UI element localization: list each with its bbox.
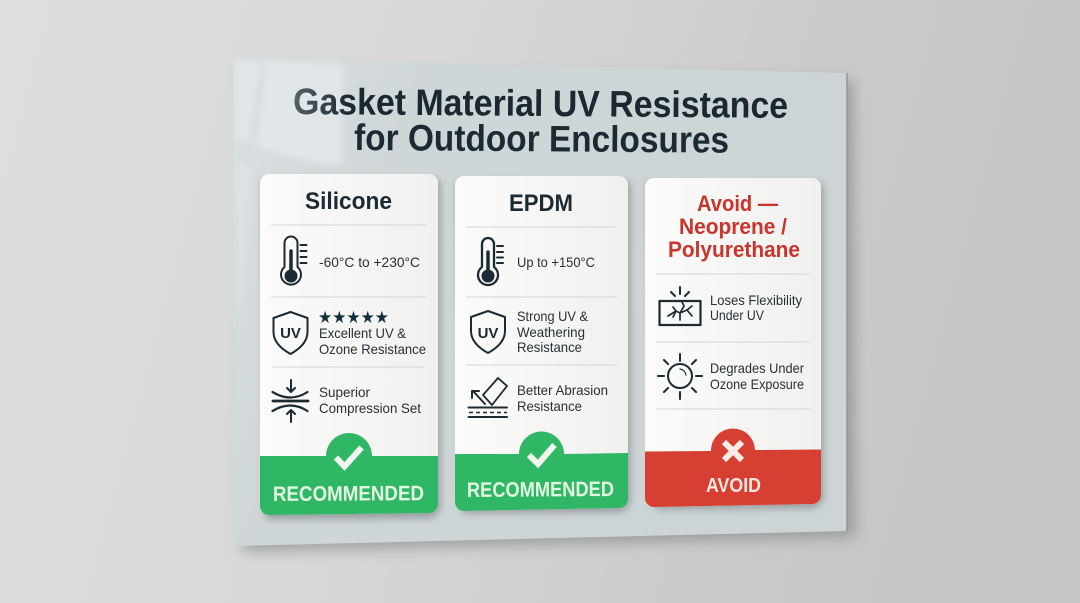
- icon: thermometer: [478, 238, 503, 285]
- heading: avoid: Polyurethane: [668, 237, 800, 262]
- heading: avoid: [668, 191, 800, 262]
- text: abrasion: Better Abrasion: [517, 382, 608, 398]
- avoid banner: AVOID: [706, 475, 761, 497]
- icon: compression: [272, 380, 308, 422]
- text: UV rating: Strong UV &: [517, 308, 589, 324]
- title: Gasket Material UV Resistance: [293, 81, 788, 126]
- panel: avoid: [645, 178, 823, 509]
- heading: avoid: Avoid —: [697, 191, 778, 216]
- text: temperature: Up to +150°C: [517, 254, 595, 270]
- rating stars: ★★★★★: [318, 308, 389, 328]
- text: compression: Compression Set: [319, 400, 421, 416]
- panel shadow: [243, 72, 855, 552]
- text: temperature: -60°C to +230°C: [319, 254, 420, 270]
- icon: UV shield: UV: [280, 325, 301, 342]
- panel: silicone: [260, 174, 440, 519]
- panel: EPDM: [455, 176, 630, 513]
- icon: thermometer: [281, 237, 306, 285]
- title: for Outdoor Enclosures: [354, 117, 729, 161]
- text: flexibility: [710, 292, 802, 323]
- recommended banner: [260, 433, 438, 515]
- text: ozone: Degrades Under: [710, 360, 804, 376]
- text: flexibility: Under UV: [710, 307, 765, 323]
- sign panel: [233, 58, 847, 546]
- text: UV rating: [319, 325, 426, 357]
- text: ozone: Ozone Exposure: [710, 376, 804, 392]
- icon: abrasion: [468, 378, 507, 417]
- text: compression: Superior: [319, 384, 370, 400]
- text: UV rating: [517, 308, 589, 355]
- text: UV rating: Ozone Resistance: [319, 341, 426, 357]
- heading: silicone: Silicone: [305, 188, 392, 215]
- icon: UV shield: UV: [478, 325, 498, 342]
- heading: avoid: Neoprene /: [679, 214, 787, 239]
- text: UV rating: Excellent UV &: [319, 325, 407, 341]
- icon: sun: [658, 354, 702, 399]
- avoid banner: [645, 429, 821, 507]
- text: abrasion: [517, 382, 608, 414]
- title: [293, 81, 788, 161]
- icon: UV shield: [471, 311, 505, 353]
- text: compression: [319, 384, 421, 416]
- text: abrasion: Resistance: [517, 398, 582, 414]
- text: UV rating: Weathering: [517, 324, 585, 340]
- heading: EPDM: EPDM: [509, 190, 573, 217]
- text: ozone: [710, 360, 804, 392]
- recommended banner: [455, 432, 628, 511]
- icon: UV shield: [274, 312, 308, 354]
- recommended banner: RECOMMENDED: [273, 482, 424, 506]
- recommended banner: RECOMMENDED: [467, 478, 614, 502]
- icon: cracked material: [660, 287, 700, 325]
- text: flexibility: Loses Flexibility: [710, 292, 802, 308]
- text: UV rating: Resistance: [517, 339, 582, 355]
